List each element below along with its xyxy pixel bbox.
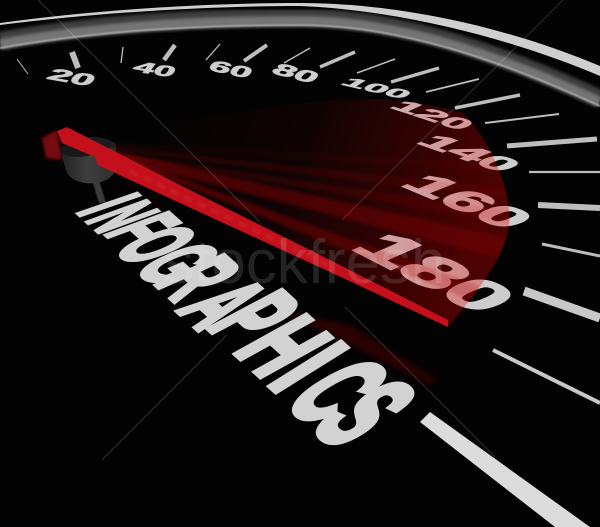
- needle hub: [60, 137, 116, 183]
- motion streaks: [110, 143, 515, 300]
- word INFOGRAPHICS: [57, 185, 444, 465]
- word INFOGRAPHICS: S: [285, 362, 444, 465]
- needle motion blur at tip: [42, 130, 62, 160]
- speed numbers: 80: [267, 60, 325, 87]
- word INFOGRAPHICS: F: [84, 204, 200, 254]
- red needle: [57, 127, 448, 327]
- speed numbers: 120: [383, 97, 482, 133]
- needle highlight stripes: [130, 171, 330, 266]
- speed numbers: 140: [408, 131, 531, 176]
- needle stem: [92, 180, 106, 203]
- speed numbers: 40: [129, 58, 180, 81]
- word INFOGRAPHICS: N: [67, 192, 177, 241]
- watermark diagonal lines: [38, 0, 563, 460]
- tick marks: [17, 44, 600, 403]
- speed numbers: 20: [43, 65, 101, 90]
- speed numbers: 100: [336, 75, 417, 101]
- word INFOGRAPHICS: R: [132, 244, 263, 312]
- word INFOGRAPHICS: O: [95, 214, 219, 275]
- speed numbers: 180: [336, 225, 533, 320]
- major tick at bottom: [420, 412, 590, 527]
- red speed sector: [65, 99, 509, 327]
- word INFOGRAPHICS: G: [114, 232, 241, 296]
- speed numbers: [43, 57, 548, 320]
- word INFOGRAPHICS: I: [57, 185, 158, 224]
- word INFOGRAPHICS: C: [259, 341, 416, 441]
- word INFOGRAPHICS: H: [211, 301, 355, 392]
- speed numbers: 60: [204, 57, 257, 82]
- stockfresh watermark: stockfresh: [163, 228, 446, 297]
- word INFOGRAPHICS: A: [154, 266, 290, 343]
- word INFOGRAPHICS: P: [183, 276, 324, 360]
- outer chrome rim: [0, 3, 600, 106]
- speed numbers: 160: [389, 169, 548, 234]
- word INFOGRAPHICS: I: [245, 326, 371, 409]
- needle reflection: [280, 310, 437, 385]
